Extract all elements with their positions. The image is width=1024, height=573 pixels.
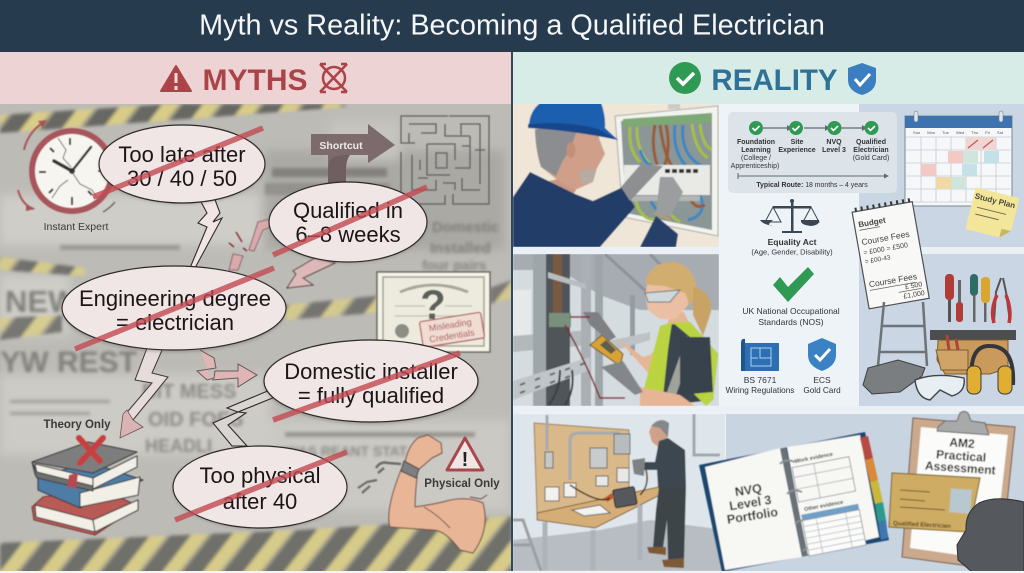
icon: tool belt bbox=[930, 330, 1016, 374]
text: BS 7671 bbox=[726, 375, 794, 395]
panel: typical route: (College / bbox=[741, 155, 771, 162]
icon: NVQ portfolio binder: NVQ bbox=[734, 481, 763, 499]
newspaper background: Installed bbox=[430, 240, 491, 257]
speech bubble: qualified: Qualified in bbox=[293, 198, 403, 223]
text: equality act: Equality Act bbox=[768, 237, 817, 247]
newspaper background: NEW bbox=[5, 284, 78, 319]
right column background bbox=[859, 104, 1024, 247]
text: NOS bbox=[742, 306, 840, 327]
icon: AM2 clipboard: AM2 bbox=[949, 435, 975, 451]
icon: gold card: Qualified Electrician bbox=[893, 521, 951, 530]
icon: NVQ portfolio binder: Level 3 bbox=[728, 493, 772, 513]
icon: NVQ portfolio binder: Portfolio bbox=[726, 505, 779, 527]
icon: certificate: ? bbox=[420, 281, 446, 328]
icon: stack of books bbox=[32, 438, 143, 535]
icon: wiring blueprint bbox=[741, 339, 779, 371]
speech bubble: engineering: Engineering degree bbox=[79, 286, 271, 311]
woman bbox=[667, 312, 689, 325]
text: NOS: Standards (NOS) bbox=[758, 317, 824, 327]
bottom strip bbox=[0, 571, 1024, 573]
label: theory only: Theory Only bbox=[43, 419, 111, 431]
icon: AM2 clipboard: Practical bbox=[936, 447, 987, 465]
reality heading bbox=[513, 52, 1024, 104]
central column white panel bbox=[719, 104, 859, 406]
text: ECS: ECS bbox=[813, 375, 831, 385]
newspaper background: WAS REANT STAT bbox=[285, 443, 408, 459]
icon: NVQ portfolio binder bbox=[699, 432, 889, 572]
arrow: engineering to domestic bbox=[197, 350, 257, 387]
title bar bbox=[0, 0, 1024, 52]
steel rack bbox=[533, 254, 546, 406]
icon: AM2 clipboard bbox=[902, 412, 1015, 570]
icon: broken clock bbox=[18, 120, 115, 214]
icon: stepladder bbox=[878, 302, 927, 366]
panel: typical route: (Gold Card) bbox=[853, 155, 889, 162]
icon: sticky note bbox=[965, 187, 1019, 240]
title bar: Myth vs Reality: Becoming a Qualified Electrician bbox=[199, 10, 825, 42]
panel: typical route: NVQ bbox=[826, 139, 842, 146]
icon: budget notepad: Course Fees bbox=[861, 229, 910, 247]
panel: typical route: Experience bbox=[778, 147, 816, 154]
icon: certificate: Misleading bbox=[428, 317, 472, 333]
icon: calendar bbox=[905, 111, 1012, 206]
panel: typical route: Apprenticeship) bbox=[731, 163, 779, 170]
icon: shortcut arrow bbox=[311, 124, 395, 184]
icon: ECS shield bbox=[808, 338, 836, 371]
icon: certificate: Credentials bbox=[429, 327, 476, 344]
panel: typical route: Level 3 bbox=[822, 147, 846, 154]
right bottom background bbox=[726, 414, 1024, 571]
speech bubble: qualified: 6–8 weeks bbox=[295, 222, 401, 247]
icon: warning bbox=[161, 66, 191, 91]
panel: typical route: Electrician bbox=[853, 147, 889, 154]
work board bbox=[534, 423, 629, 513]
arrow head: theory only bbox=[120, 410, 143, 438]
panel: reality bbox=[513, 52, 1024, 572]
icon: AM2 clipboard: Assessment bbox=[925, 459, 996, 477]
speech bubble: too physical: Too physical bbox=[199, 463, 321, 488]
icon: budget notepad: Course Fees bbox=[868, 271, 918, 289]
icon: budget notepad: Budget bbox=[858, 216, 887, 229]
newspaper background: HEADLI bbox=[145, 436, 212, 456]
speech bubble: engineering bbox=[62, 266, 286, 352]
speech bubble: domestic: Domestic installer bbox=[284, 359, 458, 384]
label: instant expert: Instant Expert bbox=[44, 221, 108, 233]
reality heading: REALITY bbox=[711, 64, 838, 97]
text: BS 7671: Wiring Regulations bbox=[726, 386, 794, 395]
text: equality act: (Age, Gender, Disability) bbox=[751, 248, 833, 256]
panel: typical route: Site bbox=[791, 139, 804, 146]
icon: ear defenders bbox=[967, 346, 1013, 394]
cable tray back bbox=[513, 330, 582, 352]
icon: safety goggles bbox=[915, 375, 964, 400]
icon: budget notepad: = £00-43 bbox=[864, 254, 891, 266]
icon: budget notepad: £ 500 bbox=[904, 281, 923, 291]
speech bubble: domestic bbox=[264, 340, 478, 424]
icon: certificate bbox=[377, 272, 490, 352]
speech bubble: too physical: after 40 bbox=[223, 489, 297, 514]
icon: scales bbox=[760, 199, 819, 233]
newspaper background bbox=[0, 120, 510, 510]
panel: typical route: Foundation bbox=[737, 139, 775, 146]
speech bubble: too late: Too late after bbox=[118, 142, 246, 167]
icon: gold card bbox=[889, 473, 980, 532]
speech bubble: too physical bbox=[173, 446, 347, 529]
newspaper background: four pairs bbox=[422, 257, 487, 273]
wires bbox=[630, 124, 712, 222]
icon: crossed target bbox=[320, 64, 347, 92]
icon: budget notepad bbox=[851, 198, 929, 309]
icon: NVQ portfolio binder: Other evidence bbox=[804, 500, 844, 513]
icon: maze bbox=[401, 116, 489, 204]
illustration: electrician testing panel bbox=[513, 254, 719, 406]
icon: sticky note: Study Plan bbox=[974, 192, 1016, 210]
newspaper background: BIT MESS bbox=[142, 381, 236, 403]
illustration: workshop practice bbox=[513, 414, 725, 571]
text: BS 7671: BS 7671 bbox=[744, 375, 777, 385]
myths heading bbox=[0, 52, 511, 104]
icon: calendar: Sun Mon Tue Wed Thu Fri Sat bbox=[913, 130, 1004, 135]
myths heading: MYTHS bbox=[202, 64, 308, 97]
multimeter bbox=[590, 335, 623, 366]
newspaper background: OID FOES bbox=[148, 409, 244, 431]
text: ECS: Gold Card bbox=[803, 386, 841, 395]
divider bbox=[511, 52, 513, 571]
icon: budget notepad: = £000 = £500 bbox=[863, 242, 909, 257]
icon: warning triangle: ! bbox=[462, 449, 468, 471]
speech bubble: too late: 30 / 40 / 50 bbox=[127, 166, 237, 191]
icon: green tick bbox=[669, 62, 701, 94]
icon: flexed arm bbox=[358, 435, 487, 553]
panel: myths bbox=[0, 104, 512, 573]
text: NOS: UK National Occupational bbox=[742, 306, 840, 316]
ladder bbox=[513, 520, 541, 571]
speech bubble tails bbox=[190, 197, 280, 446]
man bbox=[548, 178, 576, 194]
icon: green check bbox=[773, 267, 814, 302]
speech bubble: too late bbox=[93, 125, 265, 204]
text: ECS bbox=[803, 375, 841, 395]
gloves bbox=[621, 164, 663, 201]
speech bubble: qualified bbox=[269, 182, 427, 263]
speech bubble: domestic: = fully qualified bbox=[298, 383, 444, 408]
hard hat bbox=[529, 100, 618, 140]
icon: hand tools bbox=[945, 274, 1010, 323]
illustration: electrician at consumer unit bbox=[513, 100, 719, 247]
panel: typical route bbox=[728, 112, 897, 193]
icon: NVQ portfolio binder: Work evidence bbox=[794, 452, 834, 465]
icon: warning triangle bbox=[447, 438, 483, 471]
arrow: engineering to books bbox=[123, 348, 168, 420]
panel: typical route: Typical Route: 18 months – 4 years bbox=[756, 182, 868, 189]
bench bbox=[537, 487, 660, 528]
newspaper background: Domestic bbox=[432, 219, 500, 236]
broken arrow between bubbles bbox=[229, 219, 335, 288]
icon: gloved hand bbox=[957, 499, 1024, 572]
panel: typical route: Learning bbox=[741, 147, 771, 154]
speech bubble: engineering: = electrician bbox=[116, 310, 234, 335]
label: physical only: Physical Only bbox=[424, 478, 500, 490]
icon: budget notepad: £1,000 bbox=[903, 290, 925, 301]
icon: shortcut arrow: Shortcut bbox=[319, 140, 363, 152]
technician bbox=[649, 420, 669, 447]
icon: blue shield bbox=[848, 63, 876, 95]
hazard stripes bbox=[0, 104, 512, 573]
panel: typical route: Qualified bbox=[856, 139, 886, 146]
icon: gloves bbox=[863, 360, 925, 394]
text: equality act bbox=[751, 237, 833, 256]
